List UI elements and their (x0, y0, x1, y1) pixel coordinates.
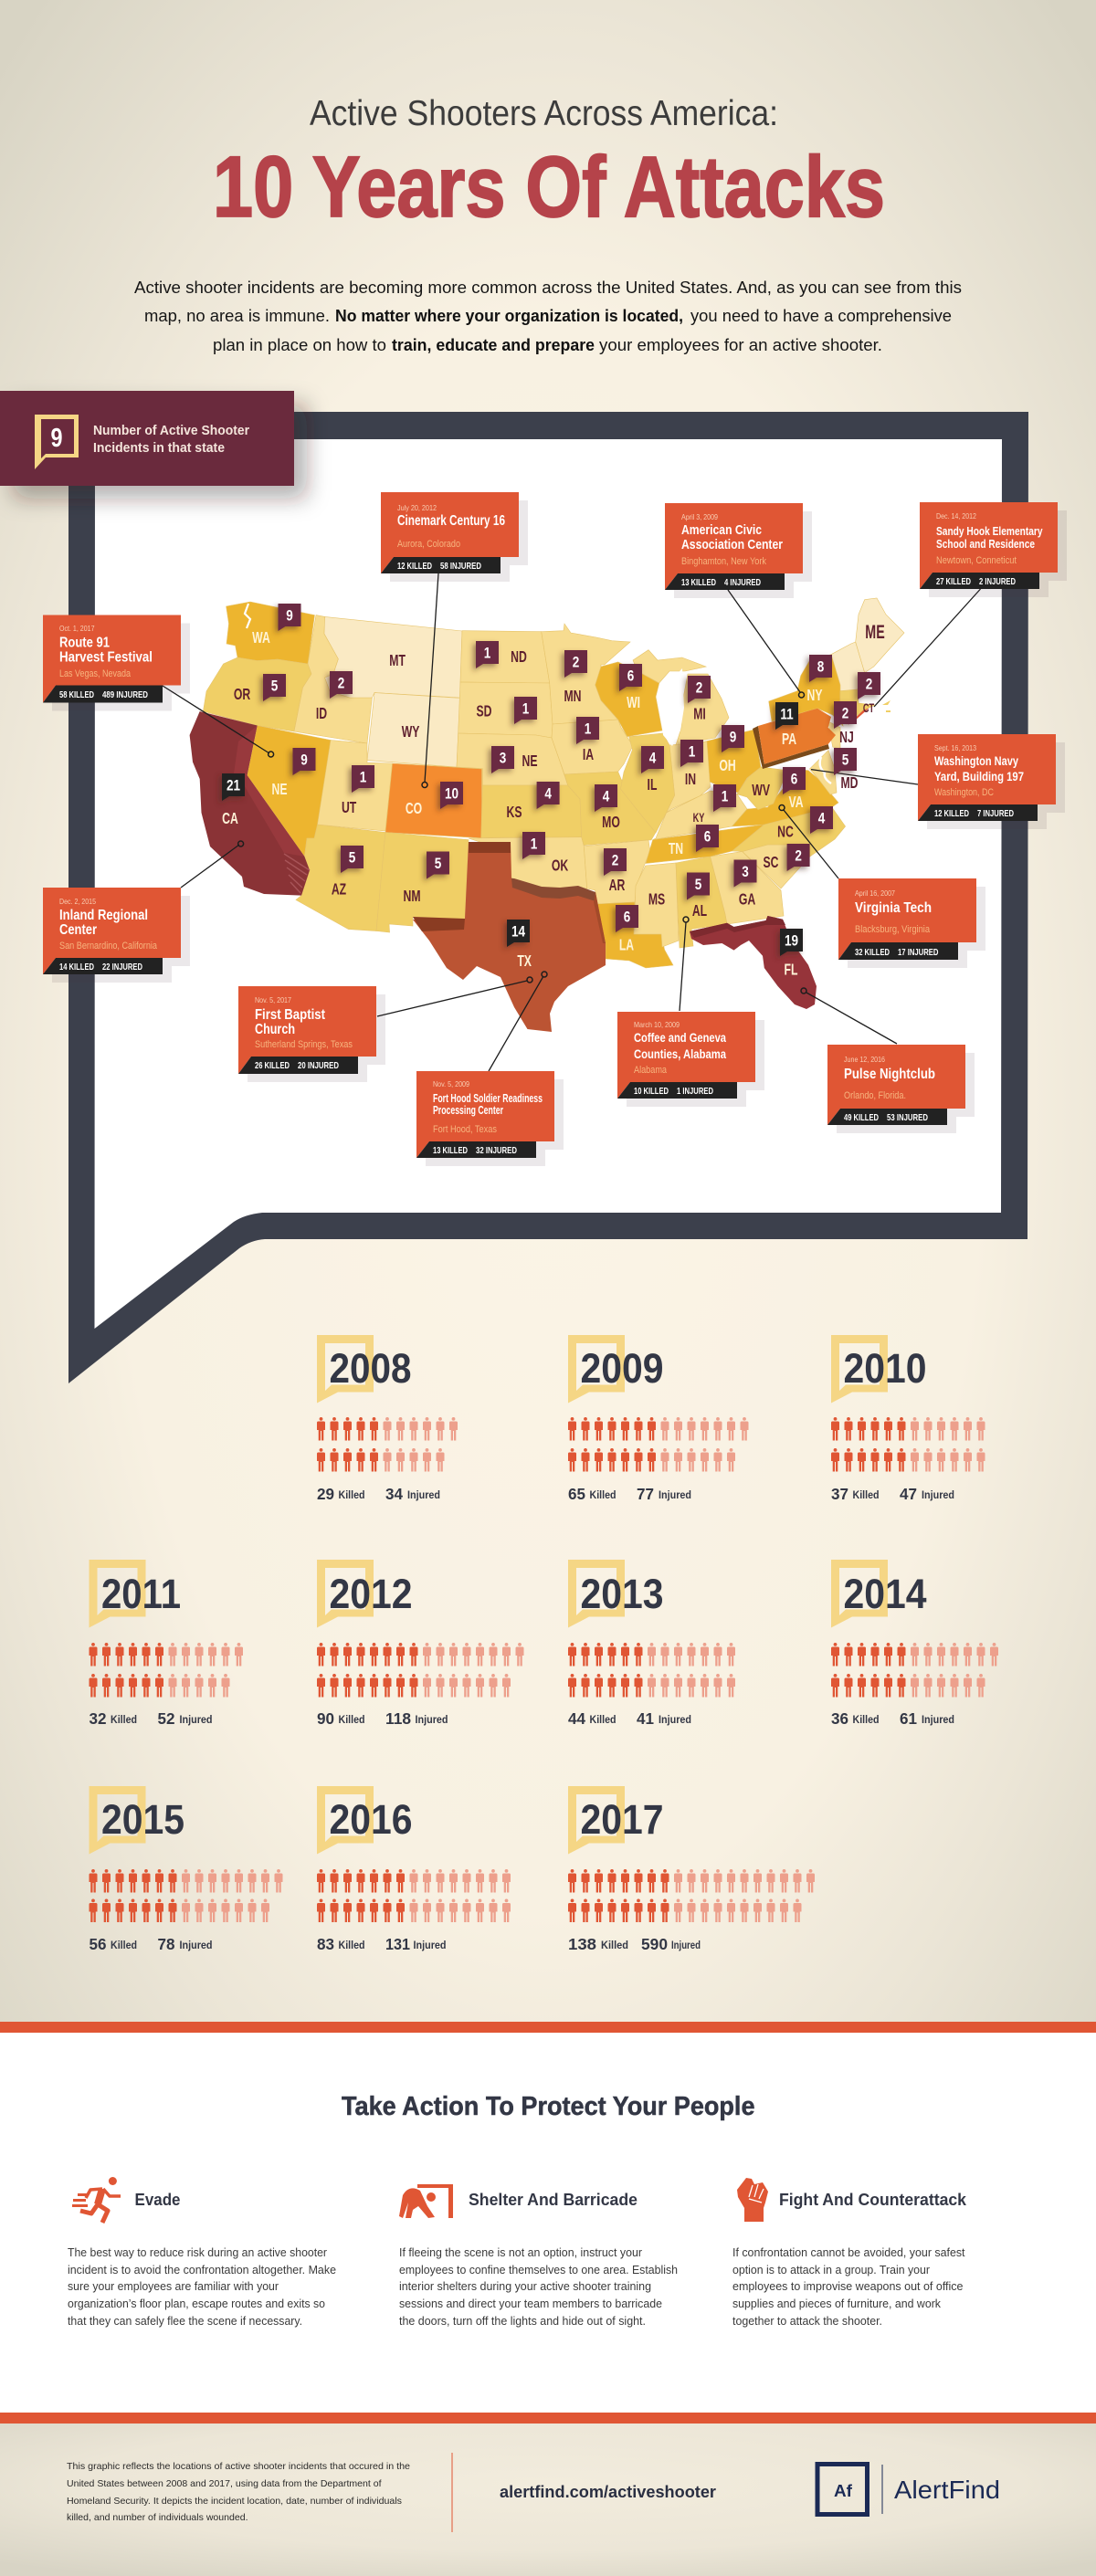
year: 2017: 2017 (581, 1796, 663, 1843)
icon: runner (evade) (72, 2177, 121, 2223)
action section panel (0, 2033, 1096, 2413)
map number badges: 8 (817, 658, 824, 676)
map number badges: 6 (791, 771, 797, 788)
speech bubble frame around map (68, 412, 1028, 1383)
fight body text (732, 2246, 965, 2328)
callout: Washington Navy Yard: 12 KILLED (934, 808, 969, 819)
map number badges: 10 (445, 785, 458, 803)
legend icon: number bubble: 9 (51, 424, 62, 453)
callout: Cinemark Century 16: Cinemark Century 16 (397, 513, 505, 529)
map number badges: 5 (435, 856, 441, 872)
map number badges: 1 (585, 720, 591, 738)
map number badges: 1 (522, 700, 529, 718)
callout: Sandy Hook: 27 KILLED (936, 576, 971, 587)
map number badges: 3 (500, 750, 506, 767)
callout: Inland Regional Center: San Bernardino, California (59, 941, 158, 952)
callout: Pulse Nightclub: 53 INJURED (887, 1112, 928, 1123)
title: main headline: 10 Years Of Attacks (213, 139, 885, 236)
connector lines with location markers (163, 573, 981, 1071)
callout: Inland Regional Center: 22 INJURED (102, 962, 142, 973)
intro paragraph: No matter where your organization is located, (335, 306, 683, 325)
year: 2011 (90, 1560, 248, 1728)
map number badges: 1 (722, 788, 728, 805)
state abbreviations: MT (389, 652, 406, 670)
year: 2008 (317, 1335, 462, 1503)
callout: Virginia Tech: April 16, 2007 (855, 888, 895, 898)
year: 2011: 2011 (101, 1571, 181, 1617)
callout: Virginia Tech: Virginia Tech (855, 900, 932, 916)
callout: Washington Navy Yard: 7 INJURED (977, 808, 1014, 819)
map number badges: 6 (704, 828, 711, 846)
callout: Route 91 Harvest Festival (43, 615, 190, 710)
state abbreviations: GA (739, 890, 755, 909)
map number badges: 2 (573, 654, 579, 671)
callout: Cinemark Century 16: 58 INJURED (440, 561, 481, 572)
callout: Route 91 Harvest Festival: Oct. 1, 2017 (59, 624, 95, 633)
year: 2017: 590 (641, 1935, 668, 1953)
year: 2009: 2009 (581, 1345, 663, 1392)
year: 2016: 83 (317, 1935, 334, 1953)
fight body text: option is to attack in a group. Train your (732, 2264, 930, 2276)
map number badges: 4 (603, 788, 610, 805)
map number badges: 2 (795, 847, 802, 865)
year: 2016: 131 (385, 1935, 410, 1953)
map number badges: 2 (612, 852, 618, 869)
callout: First Baptist Church: 20 INJURED (298, 1060, 339, 1071)
year: 2013: Injured (659, 1715, 691, 1726)
year: 2014: 2014 (844, 1571, 926, 1617)
shelter body text (399, 2246, 678, 2328)
year: 2010: 2010 (844, 1345, 926, 1392)
year: 2017: 138 (568, 1935, 596, 1953)
state abbreviations: OR (234, 686, 250, 704)
state abbreviations: CT (863, 702, 874, 716)
fight body text: If confrontation cannot be avoided, your safest (732, 2246, 965, 2259)
callout: Pulse Nightclub: Pulse Nightclub (844, 1067, 935, 1082)
callout: Coffee and Geneva Counties: Coffee and Geneva (634, 1030, 726, 1045)
callout: Inland Regional Center: Inland Regional (59, 908, 148, 923)
map number badges: 4 (544, 785, 552, 803)
label: Evade: Evade (135, 2191, 181, 2209)
state abbreviations: MN (564, 688, 582, 706)
callout: Washington Navy Yard: Washington Navy (934, 753, 1018, 768)
callout: Washington Navy Yard (918, 734, 1065, 829)
state abbreviations: IN (685, 771, 696, 789)
state abbreviations: ID (316, 705, 327, 723)
map number badges: 4 (649, 750, 657, 767)
map number badges: 2 (842, 705, 848, 722)
map number badges: 19 (785, 932, 798, 950)
year: 2013: 41 (637, 1709, 654, 1728)
callout: American Civic Association Center: 13 KILLED (681, 577, 716, 588)
callout: American Civic Association Center: American Civic (681, 523, 762, 538)
AlertFind logo: Af (834, 2482, 853, 2500)
year: 2010: 47 (900, 1485, 917, 1503)
state abbreviations (222, 621, 885, 979)
year: 2010: Injured (922, 1490, 954, 1501)
map number badges: 5 (842, 752, 848, 769)
state abbreviations: SD (477, 702, 491, 720)
legend icon: number bubble (35, 415, 79, 469)
callout: Cinemark Century 16: 12 KILLED (397, 561, 432, 572)
year: 2013: 2013 (581, 1571, 663, 1617)
year: 2014: Injured (922, 1715, 954, 1726)
AlertFind logo: AlertFind (894, 2476, 1000, 2504)
state: Florida extruded (690, 916, 817, 1009)
map number badges: 2 (338, 675, 344, 692)
callout: Inland Regional Center (43, 888, 190, 983)
callout: Sandy Hook: Newtown, Conneticut (936, 555, 1017, 566)
state abbreviations: MI (693, 705, 706, 723)
state abbreviations: TN (669, 840, 683, 858)
callout: Pulse Nightclub: Orlando, Florida. (844, 1090, 906, 1101)
year: 2012: Injured (415, 1715, 448, 1726)
callout: Coffee and Geneva Counties: 1 INJURED (677, 1086, 713, 1097)
intro paragraph (134, 278, 962, 354)
state abbreviations: CO (406, 800, 422, 818)
year: 2012: 118 (385, 1709, 411, 1728)
state abbreviations: SC (764, 854, 778, 872)
state abbreviations: OH (719, 757, 736, 775)
year: 2008: Killed (338, 1490, 365, 1501)
state abbreviations: WI (627, 694, 640, 712)
intro paragraph: your employees for an active shooter. (599, 335, 882, 354)
callout: Fort Hood (416, 1071, 564, 1166)
evade body text: incident is to avoid the confrontation altogether. Make (68, 2264, 336, 2276)
callout: Virginia Tech: Blacksburg, Virginia (855, 924, 931, 935)
map number badges: 2 (696, 679, 702, 697)
year: 2011: 32 (90, 1709, 107, 1728)
legend text (93, 424, 249, 456)
fight body text: together to attack the shooter. (732, 2315, 882, 2328)
orange divider bar bottom (0, 2413, 1096, 2424)
callout: First Baptist Church: First Baptist (255, 1007, 325, 1023)
callout: First Baptist Church: Church (255, 1022, 295, 1037)
state abbreviations: WV (752, 782, 771, 800)
year: 2010 (831, 1335, 990, 1503)
shelter body text: employees to confine themselves to one area. Establish (399, 2264, 678, 2276)
intro paragraph: you need to have a comprehensive (690, 306, 952, 325)
map number badges: 9 (300, 752, 308, 769)
year: 2013: 44 (568, 1709, 585, 1728)
year: 2009 (568, 1335, 754, 1503)
year: 2016: Injured (413, 1940, 446, 1951)
callout: American Civic Association Center: 4 INJURED (724, 577, 761, 588)
intro paragraph: Active shooter incidents are becoming more common across the United States. And, as you can see from this (134, 278, 962, 297)
evade body text: sure your employees are familiar with your (68, 2280, 279, 2293)
icon: raised fist (737, 2178, 768, 2222)
callout: Cinemark Century 16 (381, 492, 528, 582)
state abbreviations: CA (222, 810, 238, 828)
state: California extruded (190, 711, 310, 896)
state abbreviations: ND (511, 648, 527, 667)
state abbreviations: ME (865, 621, 885, 643)
callout: Inland Regional Center: Center (59, 922, 97, 938)
callout: Coffee and Geneva Counties: Counties, Alabama (634, 1046, 726, 1061)
callout: First Baptist Church: Nov. 5, 2017 (255, 995, 291, 1004)
AlertFind logo (817, 2464, 1000, 2515)
legend text: Incidents in that state (93, 441, 225, 456)
callout: Coffee and Geneva Counties (617, 1012, 764, 1107)
year: 2015 (90, 1786, 288, 1953)
callout: Fort Hood: Nov. 5, 2009 (433, 1079, 469, 1088)
year: 2014: 61 (900, 1709, 917, 1728)
orange divider bar top (0, 2022, 1096, 2033)
callout: Inland Regional Center: Dec. 2, 2015 (59, 897, 96, 906)
state abbreviations: MD (840, 774, 859, 793)
callout: Fort Hood: Processing Center (433, 1104, 503, 1117)
map number badges: 5 (349, 849, 355, 867)
intro paragraph: plan in place on how to (213, 335, 386, 354)
year: 2009: 65 (568, 1485, 585, 1503)
state abbreviations: KY (693, 812, 705, 825)
map number badges: 14 (511, 923, 526, 941)
map number badges: 6 (627, 668, 634, 685)
year: 2014: Killed (853, 1715, 879, 1726)
callout: American Civic Association Center (665, 503, 812, 598)
callout: Virginia Tech: 32 KILLED (855, 947, 890, 958)
callout: Fort Hood: 32 INJURED (476, 1145, 517, 1156)
year: 2012 (317, 1560, 529, 1728)
callout: Coffee and Geneva Counties: 10 KILLED (634, 1086, 669, 1097)
state abbreviations: NY (807, 687, 822, 705)
legend text: Number of Active Shooter (93, 424, 249, 438)
background: cream page (0, 0, 1096, 2022)
state abbreviations: WA (252, 629, 270, 647)
callout: Route 91 Harvest Festival: 58 KILLED (59, 689, 94, 700)
callout: Cinemark Century 16: Aurora, Colorado (397, 539, 460, 550)
year: 2013 (568, 1560, 740, 1728)
shelter body text: the doors, turn off the lights and hide out of sight. (399, 2315, 646, 2328)
year: 2009: Killed (590, 1490, 616, 1501)
year: 2015: 56 (90, 1935, 107, 1953)
year: 2010: Killed (853, 1490, 879, 1501)
map number badges: 6 (624, 909, 630, 926)
callout: Fort Hood: Fort Hood Soldier Readiness (433, 1092, 543, 1105)
callout: Route 91 Harvest Festival: Las Vegas, Nevada (59, 668, 132, 679)
callout: Sandy Hook: 2 INJURED (979, 576, 1016, 587)
year: 2017: Killed (601, 1940, 628, 1951)
year: 2011: Injured (179, 1715, 212, 1726)
footer note: Homeland Security. It depicts the incident location, date, number of individuals (67, 2496, 402, 2507)
state abbreviations: NC (777, 823, 794, 841)
intro paragraph: map, no area is immune. (144, 306, 330, 325)
state abbreviations: MO (602, 814, 620, 832)
footer note: United States between 2008 and 2017, using data from the Department of (67, 2478, 382, 2489)
year: 2016: 2016 (329, 1796, 413, 1843)
map number badges (222, 604, 880, 956)
callout: First Baptist Church: Sutherland Springs, Texas (255, 1039, 353, 1050)
state abbreviations: IA (583, 746, 594, 764)
callout: Washington Navy Yard: Washington, DC (934, 787, 994, 798)
year: 2009: Injured (659, 1490, 691, 1501)
year: 2012: 2012 (329, 1571, 413, 1617)
callout: Coffee and Geneva Counties: Alabama (634, 1065, 668, 1076)
callout: Pulse Nightclub: 49 KILLED (844, 1112, 879, 1123)
state: Texas extruded (413, 842, 606, 1032)
year: 2015: Killed (111, 1940, 137, 1951)
callout: Coffee and Geneva Counties: March 10, 2009 (634, 1020, 680, 1029)
state abbreviations: NM (403, 888, 421, 906)
intro paragraph: train, educate and prepare (392, 335, 595, 354)
shelter body text: sessions and direct your team members to barricade (399, 2297, 662, 2310)
year: 2008: 2008 (329, 1345, 411, 1392)
map number badges: 21 (227, 777, 240, 794)
year: 2012: 90 (317, 1709, 334, 1728)
state abbreviations: VA (789, 794, 804, 812)
map number badges: 2 (866, 676, 872, 693)
callout: American Civic Association Center: Association Center (681, 538, 783, 552)
fight body text: employees to improvise weapons out of office (732, 2280, 964, 2293)
state abbreviations: NE (522, 752, 537, 771)
callout: Pulse Nightclub (827, 1045, 975, 1133)
map number badges: 1 (689, 743, 695, 761)
state abbreviations: OK (552, 857, 568, 875)
state abbreviations: WY (402, 723, 419, 741)
year: 2014: 36 (831, 1709, 848, 1728)
state abbreviations: IL (648, 776, 657, 794)
year: 2016: Killed (338, 1940, 365, 1951)
map number badges: 11 (780, 706, 794, 723)
callout: American Civic Association Center: April 3, 2009 (681, 512, 718, 521)
callout: Route 91 Harvest Festival: 489 INJURED (102, 689, 148, 700)
callout: Route 91 Harvest Festival: Harvest Festival (59, 650, 153, 665)
map number badges: 5 (695, 877, 701, 893)
map number badges: 4 (818, 810, 826, 827)
callout: Virginia Tech: 17 INJURED (898, 947, 939, 958)
year: 2009: 77 (637, 1485, 654, 1503)
map number badges: 1 (360, 769, 366, 786)
callout: Inland Regional Center: 14 KILLED (59, 962, 94, 973)
callout: American Civic Association Center: Binghamton, New York (681, 556, 766, 567)
callout: Virginia Tech (838, 878, 985, 968)
state abbreviations: LA (619, 936, 634, 954)
callout: Cinemark Century 16: July 20, 2012 (397, 503, 437, 512)
evade body text: that they can safely flee the scene if necessary. (68, 2315, 302, 2328)
evade body text: organization’s floor plan, escape routes and exits so (68, 2297, 325, 2310)
state abbreviations: MS (648, 890, 665, 909)
year: 2010: 37 (831, 1485, 848, 1503)
state abbreviations: AL (692, 902, 707, 920)
Lake Michigan (660, 668, 684, 746)
year: 2015: Injured (179, 1940, 212, 1951)
legend panel (0, 391, 294, 486)
year: 2017: Injured (671, 1940, 701, 1951)
year: 2017 (568, 1786, 820, 1953)
year: 2013: Killed (590, 1715, 616, 1726)
footer note (67, 2461, 410, 2523)
callout: Route 91 Harvest Festival: Route 91 (59, 636, 110, 650)
year: 2015: 2015 (101, 1796, 184, 1843)
state abbreviations: AR (609, 877, 625, 895)
title block (213, 94, 885, 236)
footer note: killed, and number of individuals wounded. (67, 2512, 248, 2523)
state abbreviations: UT (342, 799, 357, 817)
state abbreviations: FL (785, 961, 797, 979)
state: Pennsylvania extruded (753, 709, 836, 769)
action heading: Take Action To Protect Your People (342, 2092, 754, 2121)
footer note: This graphic reflects the locations of active shooter incidents that occured in the (67, 2461, 410, 2472)
year: 2008: 34 (385, 1485, 403, 1503)
callout: Fort Hood: Fort Hood, Texas (433, 1124, 497, 1135)
callout: Washington Navy Yard: Sept. 16, 2013 (934, 743, 976, 752)
state abbreviations: TX (517, 952, 532, 971)
map number badges: 1 (531, 836, 537, 853)
footer url: alertfind.com/activeshooter (500, 2482, 716, 2501)
evade body text: The best way to reduce risk during an active shooter (68, 2246, 327, 2259)
map number badges: 9 (730, 729, 736, 746)
callout: First Baptist Church (238, 986, 385, 1082)
callout: Fort Hood: 13 KILLED (433, 1145, 468, 1156)
year: 2016 (317, 1786, 515, 1953)
map number badges: 9 (286, 607, 293, 625)
fight body text: supplies and pieces of furniture, and work (732, 2297, 942, 2310)
map number badges: 5 (271, 678, 278, 695)
footer panel (0, 2424, 1096, 2576)
year: 2014 (831, 1560, 1003, 1728)
callout: Sandy Hook: School and Residence (936, 537, 1035, 551)
map of US states (190, 598, 904, 1032)
shelter body text: interior shelters during your active shooter training (399, 2280, 651, 2293)
label: Fight And Counterattack: Fight And Counterattack (779, 2191, 967, 2209)
year: 2011: Killed (111, 1715, 137, 1726)
shelter body text: If fleeing the scene is not an option, instruct your (399, 2246, 642, 2259)
label: Shelter And Barricade: Shelter And Barricade (469, 2191, 638, 2209)
callout: Washington Navy Yard: Yard, Building 197 (934, 769, 1024, 783)
year: 2011: 52 (157, 1709, 175, 1728)
callout: First Baptist Church: 26 KILLED (255, 1060, 290, 1071)
white map panel (95, 439, 1002, 1329)
state abbreviations: AZ (332, 880, 346, 899)
callout: Sandy Hook: Sandy Hook Elementary (936, 524, 1043, 538)
callout: Pulse Nightclub: June 12, 2016 (844, 1055, 885, 1064)
map number badges: 3 (742, 864, 749, 880)
evade body text (68, 2246, 336, 2328)
callout: Sandy Hook (920, 502, 1067, 597)
icon: person barricading door (399, 2184, 453, 2218)
title: first line: Active Shooters Across America: (310, 94, 778, 133)
state abbreviations: PA (782, 731, 796, 749)
year: 2012: Killed (338, 1715, 365, 1726)
state abbreviations: NJ (839, 729, 854, 747)
map number badges: 1 (484, 645, 490, 662)
state abbreviations: KS (507, 804, 522, 822)
year: 2008: Injured (407, 1490, 440, 1501)
state abbreviations: NE (272, 781, 287, 799)
callout: Sandy Hook: Dec. 14, 2012 (936, 511, 976, 520)
year: 2015: 78 (157, 1935, 175, 1953)
year: 2008: 29 (317, 1485, 334, 1503)
